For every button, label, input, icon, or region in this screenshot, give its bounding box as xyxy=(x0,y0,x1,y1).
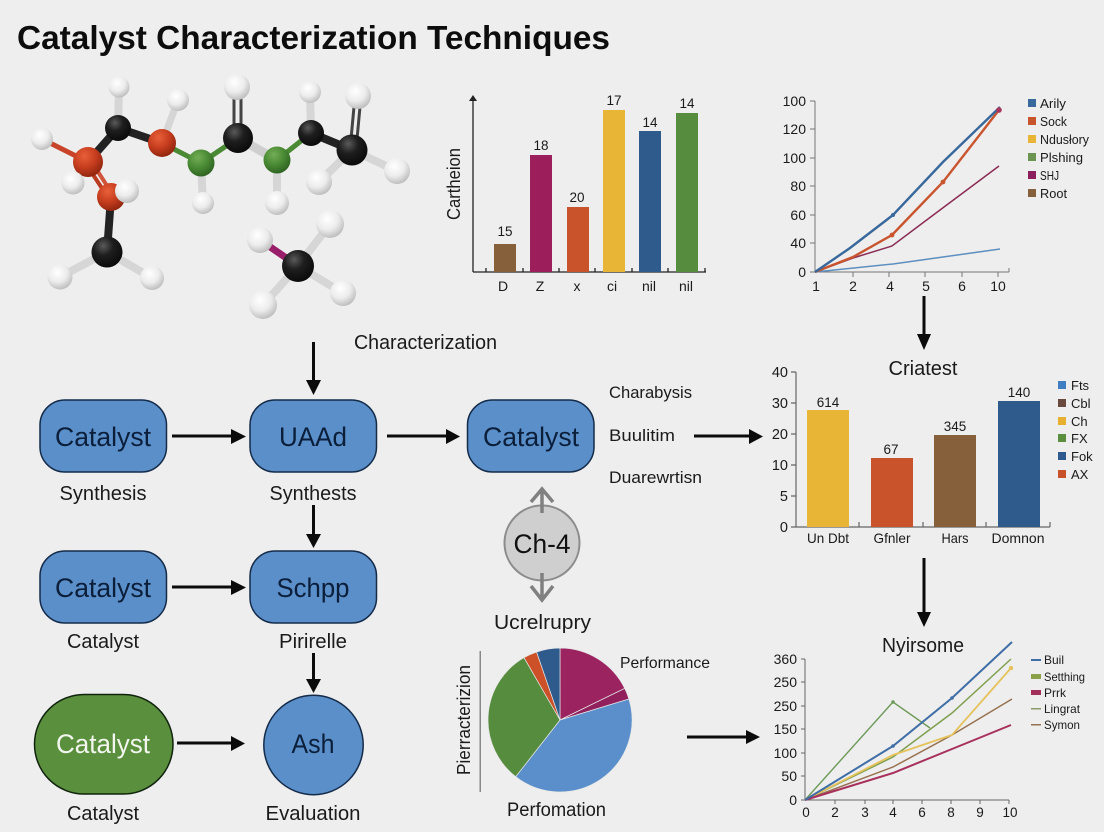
line chart: top right xyxy=(783,93,1089,294)
legend: AX xyxy=(1071,467,1089,482)
line chart: top right: 10 xyxy=(990,278,1006,294)
line chart: bottom right: 100 xyxy=(774,745,797,761)
bar chart: top centre: ci xyxy=(607,278,617,294)
line chart: top right: 5 xyxy=(922,278,930,294)
legend xyxy=(1058,378,1093,482)
pie label: Perfomation: Perfomation xyxy=(507,800,606,821)
bar chart: middle right: 140 xyxy=(1008,385,1030,400)
flow node: Catalyst row two xyxy=(40,551,166,653)
chart title: Criatest xyxy=(888,358,958,380)
bar chart: middle right: 0 xyxy=(780,520,788,536)
flow node: Catalyst synthesis: Catalyst xyxy=(55,422,151,452)
flow node: green Catalyst: Catalyst xyxy=(56,729,150,759)
bar chart: top centre: 14 xyxy=(642,115,658,130)
bar chart: middle right xyxy=(772,358,1093,546)
bar chart: top centre: 14 xyxy=(679,96,695,111)
legend: Root xyxy=(1040,186,1067,201)
line chart: bottom right: 0 xyxy=(802,805,810,820)
flow node: UAAd synthesis xyxy=(250,400,376,505)
y axis label: Cartheion xyxy=(444,148,464,220)
line chart: top right: 1 xyxy=(812,278,820,294)
line chart: bottom right xyxy=(774,635,1085,820)
flow node: Catalyst characterization: Catalyst xyxy=(483,422,579,452)
line chart: top right: 40 xyxy=(790,235,806,251)
arrow xyxy=(172,580,246,595)
bar chart: middle right: Gfnler xyxy=(874,530,911,546)
molecule: main chain xyxy=(31,74,410,290)
line chart: bottom right: 150 xyxy=(774,721,797,737)
label: characterization: Characterization xyxy=(354,332,497,354)
flow node: Ash evaluation: Ash xyxy=(292,729,334,759)
text block: analysis labels: Buulitim xyxy=(609,426,675,445)
arrow: characterization down xyxy=(306,342,321,395)
line chart: top right: 80 xyxy=(790,178,806,194)
arrow xyxy=(172,429,246,444)
flow node: Catalyst row two: Catalyst xyxy=(55,573,151,603)
arrow: bar chart to line chart xyxy=(917,558,931,627)
legend: Lingrat xyxy=(1044,702,1081,716)
bar chart: middle right: 10 xyxy=(772,458,788,474)
legend: Fok xyxy=(1071,449,1093,464)
line chart: top right: 100 xyxy=(783,150,806,166)
line chart: bottom right: 3 xyxy=(861,805,869,820)
legend: Symon xyxy=(1044,718,1080,732)
flow node: Catalyst row two: Catalyst xyxy=(67,631,139,653)
line chart: top right: 2 xyxy=(849,278,857,294)
bar chart: top centre: nil xyxy=(642,278,656,294)
pie axis label: Pierracterizion xyxy=(454,665,474,775)
flow node: green Catalyst: Catalyst xyxy=(67,803,139,825)
bar chart: top centre xyxy=(444,93,706,294)
text block: analysis labels: Duarewrtisn xyxy=(609,468,702,487)
arrow xyxy=(387,429,460,444)
legend xyxy=(1031,653,1085,732)
flow node: green Catalyst xyxy=(34,694,173,825)
arrow xyxy=(694,429,763,444)
arrow xyxy=(306,653,321,693)
flow node: UAAd synthesis: UAAd xyxy=(279,422,347,452)
line chart: bottom right: 4 xyxy=(889,805,897,820)
bar chart: top centre: 17 xyxy=(606,93,622,108)
line chart: bottom right: 2 xyxy=(831,805,839,820)
legend: SHJ xyxy=(1040,168,1059,183)
line chart: bottom right: 10 xyxy=(1002,805,1018,820)
bar chart: middle right: 345 xyxy=(944,419,966,434)
line chart: top right: 6 xyxy=(958,278,966,294)
legend: Sock xyxy=(1040,114,1067,129)
bar chart: middle right: Domnon xyxy=(992,530,1044,546)
pie side axis line xyxy=(480,651,481,792)
flow node: Schpp xyxy=(250,551,376,653)
bar chart: middle right: 20 xyxy=(772,427,788,443)
bar chart: middle right: 614 xyxy=(817,395,840,410)
legend: Setthing xyxy=(1044,670,1085,684)
line chart: top right: 4 xyxy=(886,278,894,294)
line chart: bottom right: 250 xyxy=(774,698,797,714)
legend: Plshing xyxy=(1040,150,1083,165)
bar chart: middle right: Hars xyxy=(942,530,968,546)
line chart: top right: 60 xyxy=(790,207,806,223)
line chart: bottom right: 360 xyxy=(774,651,797,667)
line chart: top right: 0 xyxy=(798,264,806,280)
bar chart: top centre: D xyxy=(498,278,508,294)
grey circle: Ch-4 with arrows xyxy=(504,489,580,600)
line chart: bottom right: 8 xyxy=(947,805,955,820)
legend: Buil xyxy=(1044,653,1064,667)
bar chart: top centre: 20 xyxy=(569,190,585,205)
legend: Ch xyxy=(1071,414,1088,429)
bar chart: top centre: x xyxy=(574,278,580,294)
legend: Cbl xyxy=(1071,396,1091,411)
bar chart: middle right: 67 xyxy=(883,442,899,457)
pie chart xyxy=(488,648,632,792)
legend: Arily xyxy=(1040,96,1067,111)
line chart: bottom right: 250 xyxy=(774,674,797,690)
line chart: top right: 120 xyxy=(783,121,806,137)
arrow xyxy=(687,730,760,744)
line chart: bottom right: 6 xyxy=(918,805,926,820)
bar chart: middle right: 30 xyxy=(772,396,788,412)
text block: analysis labels: Charabysis xyxy=(609,383,692,402)
arrow: synthesis to Schpp xyxy=(306,505,321,548)
molecule: small methane-like xyxy=(247,210,356,319)
flow node: Schpp: Pirirelle xyxy=(279,631,347,653)
line chart: bottom right: 0 xyxy=(789,792,797,808)
line chart: bottom right: 9 xyxy=(976,805,984,820)
legend xyxy=(1028,96,1089,201)
flow node: Catalyst synthesis xyxy=(40,400,166,505)
line chart: top right: 100 xyxy=(783,93,806,109)
bar chart: top centre: 15 xyxy=(497,224,513,239)
flow node: Ash evaluation xyxy=(264,695,363,825)
flow node: Ash evaluation: Evaluation xyxy=(266,803,360,825)
arrow xyxy=(177,736,245,751)
legend: Fts xyxy=(1071,378,1090,393)
title: Catalyst Characterization Techniques xyxy=(17,20,610,57)
flow node: Schpp: Schpp xyxy=(276,573,350,603)
bar chart: top centre: nil xyxy=(679,278,693,294)
bar chart: middle right: Un Dbt xyxy=(807,530,849,546)
flow node: UAAd synthesis: Synthests xyxy=(270,483,356,505)
label: Ucrelrupry: Ucrelrupry xyxy=(494,612,591,634)
grey circle: Ch-4 with arrows: Ch-4 xyxy=(514,529,570,559)
flow node: Catalyst characterization xyxy=(468,400,594,472)
pie label: Performance: Performance xyxy=(620,655,710,672)
flow node: Catalyst synthesis: Synthesis xyxy=(60,483,146,505)
bar chart: top centre: 18 xyxy=(533,138,549,153)
arrow: top chart to bar chart xyxy=(917,296,931,350)
bar chart: middle right: 40 xyxy=(772,365,788,381)
chart title: Nyirsome xyxy=(882,635,964,657)
line chart: bottom right: 50 xyxy=(781,768,797,784)
legend: FX xyxy=(1071,431,1088,446)
legend: Prrk xyxy=(1044,686,1067,700)
bar chart: middle right: 5 xyxy=(780,489,788,505)
text block: analysis labels xyxy=(609,383,702,487)
bar chart: top centre: Z xyxy=(536,278,545,294)
legend: Ndusłory xyxy=(1040,132,1089,147)
